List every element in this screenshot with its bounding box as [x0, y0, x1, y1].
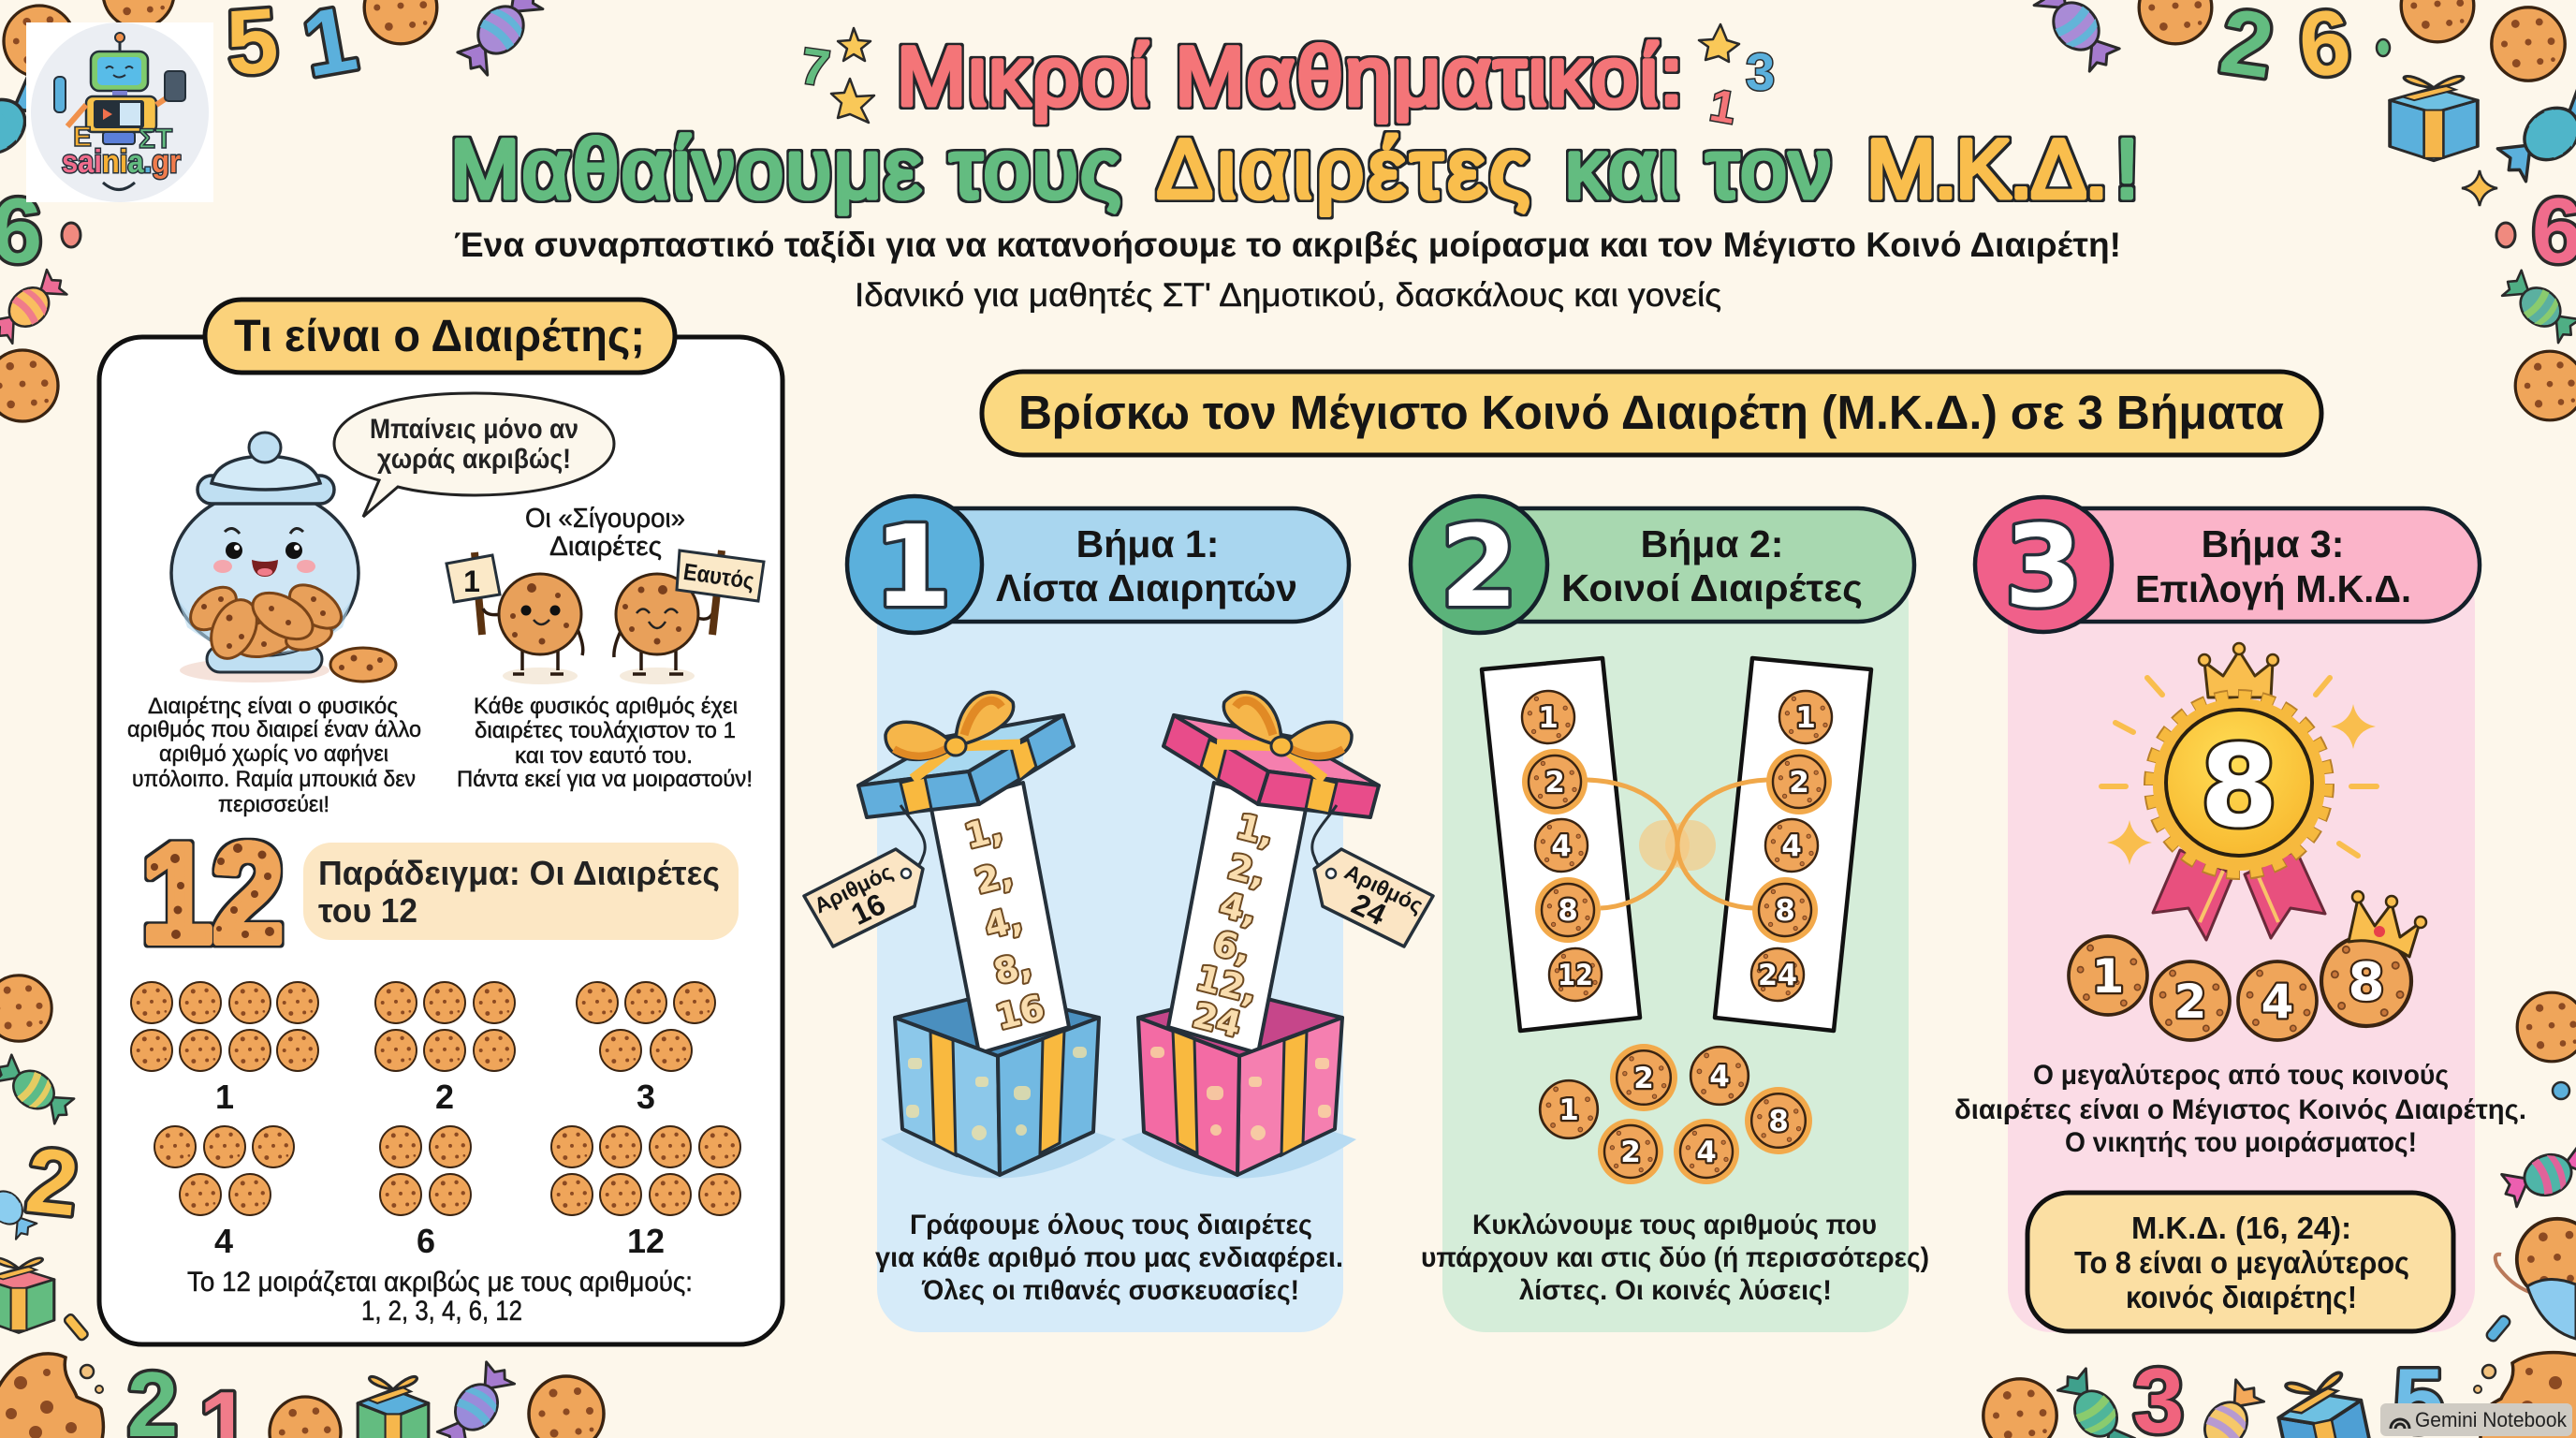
gift box with list for 24: 4, [1216, 885, 1262, 932]
cookie group: 6 [380, 1126, 471, 1260]
step 3 header: 3 [2004, 503, 2083, 633]
watermark badge [2380, 1403, 2572, 1436]
step 1 caption: Όλες οι πιθανές συσκευασίες! [921, 1275, 1299, 1306]
robot icon: ΣΤ [139, 124, 172, 154]
text: definition of divisor: αριθμό χωρίς νο αφήνει [159, 741, 388, 767]
cookie group: 4 [154, 1126, 294, 1260]
step 2 caption: Κυκλώνουμε τους αριθμούς που [1472, 1210, 1877, 1240]
example label: Παράδειγμα: Οι Διαιρέτες [318, 854, 720, 892]
gift box with list for 16: 16 [992, 987, 1048, 1038]
left list cookies: 4 [1551, 829, 1572, 863]
cookie group: 12: 12 [627, 1222, 665, 1260]
panel heading: Τι είναι ο Διαιρέτης; [234, 312, 645, 361]
robot icon [54, 33, 185, 154]
step 2 header: Κοινοί Διαιρέτες [1561, 566, 1863, 609]
title ornaments: 1 [1706, 81, 1739, 134]
title ornaments: 7 [798, 37, 833, 97]
gift box with list for 16: 4, [980, 899, 1026, 946]
step 1 header [847, 496, 1349, 633]
decorations: top-left corner [0, 0, 548, 180]
gift box with list for 16: Αριθμός [811, 859, 897, 917]
list strip: divisors right [1715, 658, 1871, 1031]
step 1 caption: για κάθε αριθμό που μας ενδιαφέρει. [875, 1242, 1343, 1273]
right list cookies: 4 [1781, 829, 1802, 863]
cookie group: 12 [551, 1126, 740, 1260]
section heading: GCD in 3 steps: Βρίσκω τον Μέγιστο Κοινό Διαιρέτη (Μ.Κ.Δ.) σε 3 Βήματα [1018, 386, 2284, 439]
example label: του 12 [318, 891, 417, 930]
left list cookies: 12 [1558, 959, 1593, 992]
title line 2: green part: Μαθαίνουμε τους [450, 122, 1120, 215]
step 1 header: Βήμα 1: [1076, 522, 1219, 565]
cookie group: 3 [577, 982, 715, 1116]
logo: sainia.gr robot badge [26, 22, 213, 202]
step 3 caption: Ο νικητής του μοιράσματος! [2065, 1127, 2417, 1158]
panel: step 2 [1411, 496, 1929, 1332]
common divisors row with crowned 8 [2069, 891, 2426, 1040]
cookie group: 4: 4 [214, 1222, 233, 1260]
text: sure divisors explanation [457, 694, 753, 792]
text: definition of divisor: υπόλοιπο. Rαμία μπουκιά δεν [132, 767, 416, 792]
cookie group: 1 [131, 982, 318, 1116]
text: sure divisors explanation: διαιρέτες τουλάχιστον το 1 [475, 718, 736, 743]
title line 1: Μικροί Μαθηματικοί: [897, 29, 1683, 123]
cookie group: 2 [375, 982, 515, 1116]
text: definition of divisor: περισσεύει! [218, 792, 329, 817]
gift box with list for 24: 2, [1224, 846, 1270, 894]
decorations: left edge [0, 179, 89, 1342]
section heading: GCD in 3 steps [982, 372, 2321, 455]
left list cookies [1522, 691, 1602, 1001]
icon: cookie holding sign self: Εαυτός [681, 559, 755, 594]
icon: smiling cookie jar [171, 433, 396, 682]
gift box with list for 16: 1, [960, 809, 1006, 857]
title ornaments [798, 24, 1775, 134]
right list cookies: 8 [1775, 894, 1795, 928]
heading: sure divisors: Διαιρέτες [549, 532, 662, 562]
step 2 header: 2 [1440, 503, 1518, 633]
gift box with list for 24: 12, [1193, 958, 1262, 1011]
gift box with list for 24 [1121, 692, 1433, 1178]
speech bubble: χωράς ακριβώς! [377, 444, 571, 475]
step 1 header: Λίστα Διαιρητών [996, 566, 1297, 609]
gift box with list for 24: 6, [1209, 923, 1255, 971]
text: divisors of 12 summary [187, 1267, 693, 1327]
left list cookies: 8 [1558, 894, 1578, 928]
step 2 caption [1421, 1210, 1929, 1306]
speech bubble [334, 393, 614, 517]
cookie group: 2: 2 [435, 1078, 454, 1116]
common divisor cookies [1540, 1044, 1812, 1184]
right list cookies [1751, 691, 1832, 1001]
step 2 header: Βήμα 2: [1641, 522, 1783, 565]
heading: sure divisors: Οι «Σίγουροι» [525, 504, 685, 534]
panel: step 3 [1954, 497, 2526, 1332]
robot icon: Ε [73, 122, 92, 153]
decorations: bottom-left row [0, 1353, 604, 1438]
title ornaments: 3 [1746, 42, 1775, 101]
step 2 header [1411, 496, 1914, 633]
step 1 caption [875, 1210, 1343, 1306]
cookie group: 3: 3 [637, 1078, 655, 1116]
audience line: Ιδανικό για μαθητές ΣΤ' Δημοτικού, δασκάλους και γονείς [855, 277, 1721, 314]
common divisors row with crowned 8: 8 [2349, 952, 2384, 1013]
panel: step 1 [804, 496, 1433, 1332]
watermark badge: Gemini Notebook [2415, 1408, 2568, 1431]
title line 2: exclamation: ! [2115, 122, 2139, 215]
common divisors row with crowned 8: 1 [2092, 949, 2124, 1004]
decorations: left edge: 2 [22, 1127, 83, 1236]
gift box with list for 24: 24 [1189, 995, 1245, 1046]
common divisor cookies: 2 [1633, 1062, 1654, 1095]
cookie group: 1: 1 [215, 1078, 234, 1116]
right list cookies: 2 [1789, 766, 1809, 800]
result box: κοινός διαιρέτης! [2126, 1280, 2357, 1314]
icon: gold medal with 8 [2101, 643, 2377, 940]
text: sure divisors explanation: Κάθε φυσικός αριθμός έχει [474, 694, 738, 719]
text: divisors of 12 summary: 1, 2, 3, 4, 6, 12 [361, 1296, 522, 1327]
connector highlight between lists [1587, 780, 1767, 908]
text: definition of divisor: αριθμός που διαιρεί έναν άλλο [127, 717, 421, 742]
right list cookies: 1 [1795, 701, 1816, 735]
right list cookies: 24 [1758, 959, 1797, 992]
common divisor cookies: 4 [1696, 1136, 1717, 1169]
icon: cookie holding sign 1 [446, 552, 583, 684]
step 2 caption: λίστες. Οι κοινές λύσεις! [1519, 1275, 1832, 1306]
icon: gold medal with 8: 8 [2200, 723, 2278, 853]
gift box with list for 16: 16 [846, 887, 890, 932]
common divisors row with crowned 8: 4 [2261, 975, 2293, 1029]
common divisor cookies: 4 [1709, 1060, 1730, 1093]
result box [2027, 1193, 2453, 1331]
text: definition of divisor [127, 694, 421, 817]
subtitle: Ένα συναρπαστικό ταξίδι για να κατανοήσουμε το ακριβές μοίρασμα και τον Μέγιστο Κοινό Διαιρέτη! [454, 226, 2121, 264]
speech bubble: Μπαίνεις μόνο αν [370, 414, 578, 445]
title line 2: and the: και τον [1565, 122, 1831, 215]
step 3 caption: Ο μεγαλύτερος από τους κοινούς [2033, 1060, 2449, 1091]
gift box with list for 24: 1, [1233, 806, 1279, 854]
panel: what is a divisor [99, 300, 783, 1344]
gift box with list for 24: Αριθμός [1340, 859, 1427, 917]
logo wordmark: sainia.gr [62, 144, 181, 180]
heading: sure divisors [525, 504, 685, 562]
common divisors row with crowned 8: 2 [2174, 975, 2206, 1029]
step 3 header: Βήμα 3: [2202, 522, 2344, 565]
step 3 header: Επιλογή Μ.Κ.Δ. [2135, 567, 2411, 610]
left list cookies: 1 [1538, 701, 1559, 735]
left list cookies: 2 [1544, 766, 1565, 800]
common divisor cookies: 2 [1620, 1136, 1641, 1169]
result box: Μ.Κ.Δ. (16, 24): [2131, 1211, 2351, 1245]
decorations: right edge and bottom-right row [1983, 992, 2576, 1438]
gift box with list for 16: 2, [971, 854, 1017, 902]
common divisor cookies: 8 [1768, 1105, 1789, 1138]
icon: big cookie number 12: 12 [141, 814, 284, 972]
text: definition of divisor: Διαιρέτης είναι ο φυσικός [148, 694, 398, 719]
step 3 caption: διαιρέτες είναι ο Μέγιστος Κοινός Διαιρέτης. [1954, 1094, 2526, 1125]
title line 2: divisors: Διαιρέτες [1157, 122, 1530, 215]
common divisor cookies: 1 [1559, 1093, 1579, 1127]
step 3 header [1975, 497, 2480, 633]
decorations: top-right corner [2029, 0, 2576, 420]
cookie group: 6: 6 [417, 1222, 435, 1260]
icon: cookie holding sign 1: 1 [463, 565, 480, 598]
step 1 caption: Γράφουμε όλους τους διαιρέτες [910, 1210, 1312, 1240]
step 2 caption: υπάρχουν και στις δύο (ή περισσότερες) [1421, 1242, 1929, 1273]
result box: Το 8 είναι ο μεγαλύτερος [2074, 1245, 2409, 1280]
text: sure divisors explanation: και τον εαυτό του. [515, 743, 693, 769]
step 1 header: 1 [873, 503, 952, 633]
gift box with list for 24: 24 [1347, 887, 1392, 932]
icon: cookie holding sign self [614, 550, 764, 684]
panel heading [205, 300, 675, 373]
gift box with list for 16: 8, [989, 945, 1035, 992]
text: sure divisors explanation: Πάντα εκεί για να μοιραστούν! [457, 767, 753, 792]
gift box with list for 16 [804, 692, 1116, 1178]
small crown [2349, 891, 2426, 957]
title [450, 29, 2139, 215]
step 3 caption [1954, 1060, 2526, 1158]
example label [303, 843, 739, 940]
list strip: divisors left [1482, 658, 1640, 1031]
title line 2: GCD: Μ.Κ.Δ. [1866, 122, 2108, 215]
text: divisors of 12 summary: Το 12 μοιράζεται ακριβώς με τους αριθμούς: [187, 1267, 693, 1298]
